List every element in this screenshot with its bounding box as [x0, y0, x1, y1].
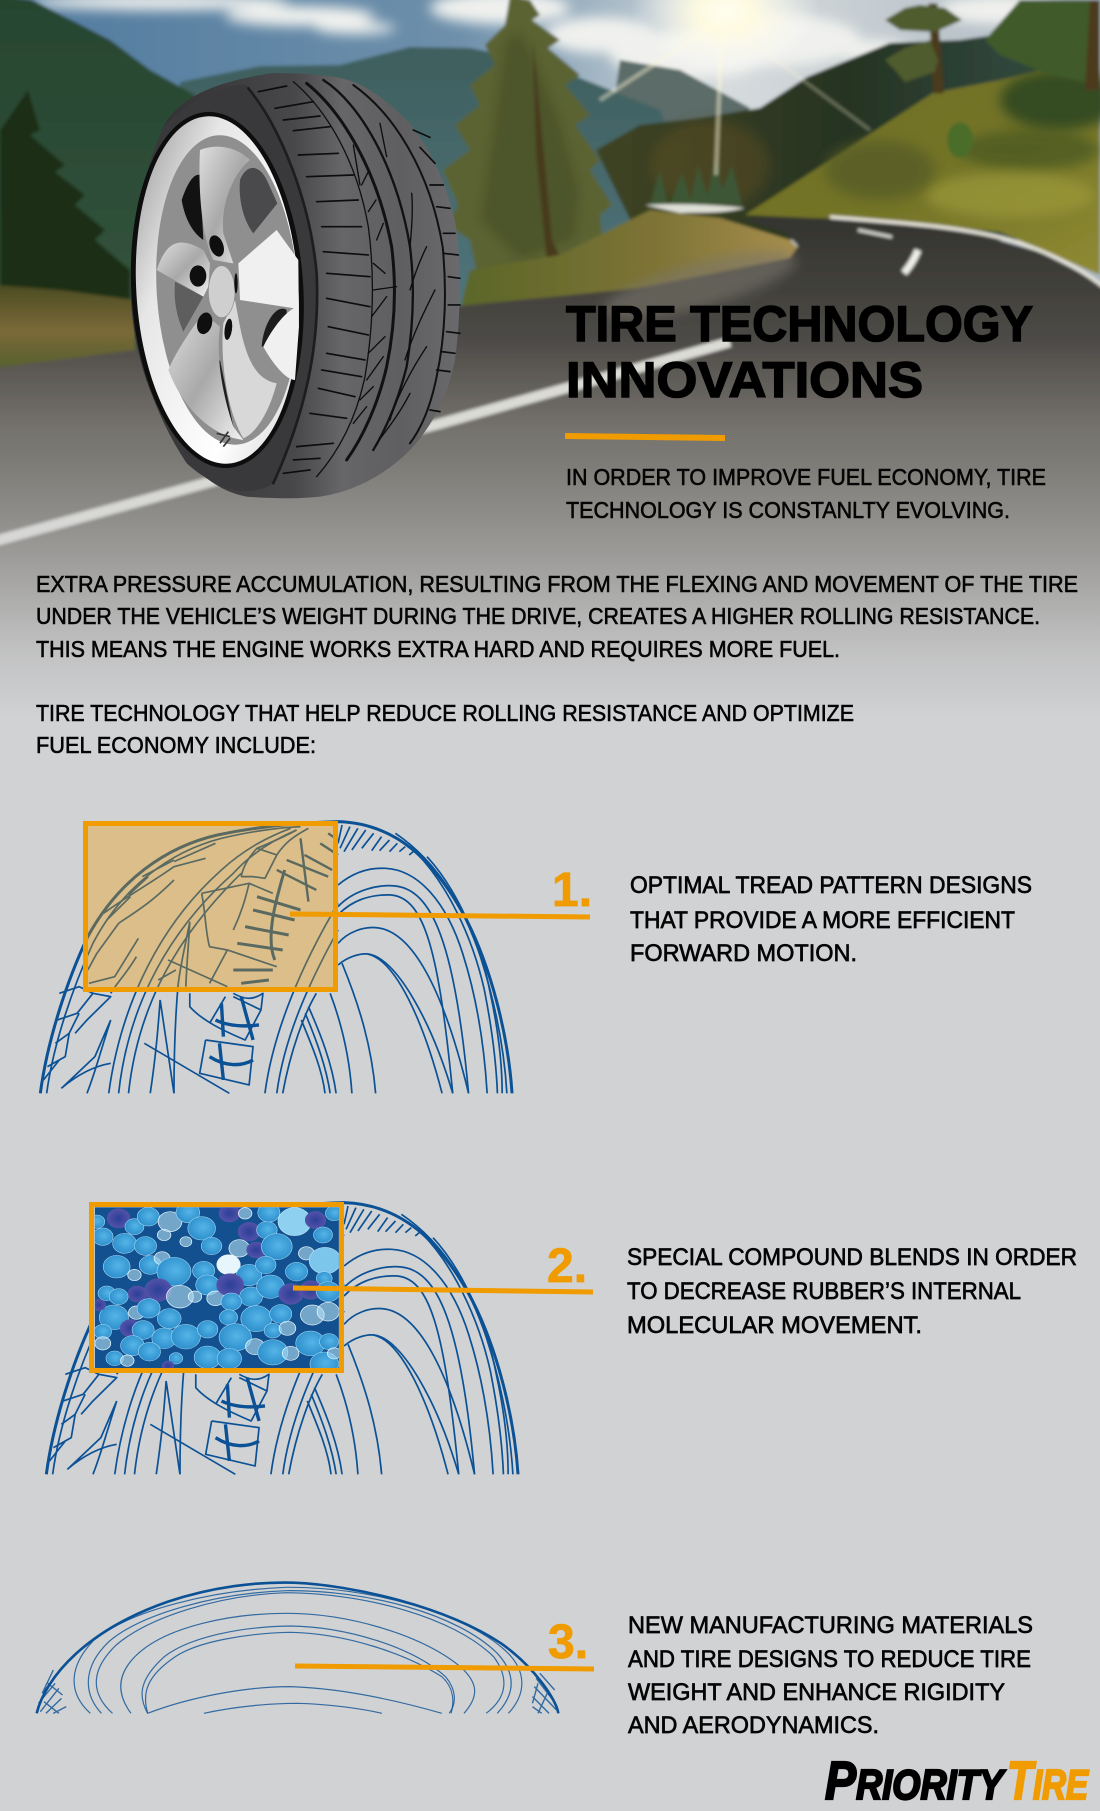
list intro [36, 700, 854, 758]
step 1 text: FORWARD MOTION. [630, 940, 857, 967]
road sunlit patch [602, 250, 799, 322]
road surface [0, 217, 1100, 720]
title [566, 296, 1033, 408]
title: INNOVATIONS [566, 352, 923, 408]
lug holes [190, 233, 238, 340]
subtitle: IN ORDER TO IMPROVE FUEL ECONOMY, TIRE [566, 464, 1046, 490]
list intro: FUEL ECONOMY INCLUDE: [36, 732, 316, 758]
sunlit right forest [595, 34, 1040, 243]
step 1 text: OPTIMAL TREAD PATTERN DESIGNS [630, 872, 1032, 899]
wheel windows [182, 175, 203, 240]
intro paragraph: UNDER THE VEHICLE’S WEIGHT DURING THE DRIVE, CREATES A HIGHER ROLLING RESISTANCE. [36, 603, 1040, 629]
far road segment [645, 204, 745, 213]
road centre line [0, 342, 730, 541]
step 3 text: AND TIRE DESIGNS TO REDUCE TIRE [628, 1646, 1031, 1673]
teal middle mountain [178, 46, 664, 308]
wheel inner [147, 131, 307, 449]
number 1: 1. [552, 864, 592, 917]
step 2 text: SPECIAL COMPOUND BLENDS IN ORDER [627, 1244, 1077, 1271]
step 3 text [628, 1612, 1033, 1739]
sky [16, 0, 1100, 283]
step 1 text [630, 872, 1032, 967]
wheel hub [208, 266, 235, 318]
clouds [30, 0, 1060, 79]
step 3 text: AND AERODYNAMICS. [628, 1712, 879, 1739]
number 2: 2. [547, 1240, 587, 1293]
grey distant peak [614, 58, 752, 125]
leader line 2 [293, 1288, 593, 1292]
title underline [565, 436, 725, 438]
leader line 1 [290, 914, 590, 917]
road right edge line [830, 217, 1100, 288]
road dashes [904, 250, 918, 273]
tire silhouette [131, 73, 460, 498]
step 2 text: TO DECREASE RUBBER’S INTERNAL [627, 1278, 1021, 1305]
warm haze over forest [650, 120, 770, 210]
tire diagram 2: compound blends [46, 1202, 518, 1474]
leader line 3 [295, 1666, 594, 1669]
molecule photo inset [94, 1207, 339, 1368]
list intro: TIRE TECHNOLOGY THAT HELP REDUCE ROLLING RESISTANCE AND OPTIMIZE [36, 700, 854, 726]
logo: Priority Tire: PRIORITY [825, 1751, 1006, 1811]
valve detail [217, 432, 230, 447]
sidewall shade [131, 85, 317, 491]
left foreground grass [0, 285, 135, 370]
left dark mountain [0, 0, 205, 350]
tread grooves [248, 80, 445, 483]
number 3: 3. [548, 1616, 588, 1669]
step 3 text: NEW MANUFACTURING MATERIALS [628, 1612, 1033, 1639]
center grass mound [460, 210, 798, 310]
left fir tree [0, 92, 130, 300]
step 2 text: MOLECULAR MOVEMENT. [627, 1312, 922, 1339]
tread block lines [258, 86, 460, 473]
sunlit hillside [745, 55, 1100, 275]
tire diagram 1: tread pattern [40, 822, 512, 1093]
step 3 text: WEIGHT AND ENHANCE RIGIDITY [628, 1679, 1005, 1706]
intro paragraph [36, 571, 1078, 662]
center pine tree [443, 0, 612, 290]
rim black edge [121, 107, 314, 473]
intro paragraph: THIS MEANS THE ENGINE WORKS EXTRA HARD AND REQUIRES MORE FUEL. [36, 636, 840, 662]
tire diagram 3: side profile [37, 1583, 558, 1713]
tire photo [121, 73, 460, 498]
step 1 text: THAT PROVIDE A MORE EFFICIENT [630, 907, 1015, 934]
subtitle [566, 464, 1046, 523]
wheel spokes [238, 230, 299, 380]
sun glow [637, 0, 808, 48]
title: TIRE TECHNOLOGY [566, 296, 1033, 352]
fade to grey [0, 340, 1100, 720]
small firs [650, 166, 742, 205]
sun rays [598, 64, 872, 178]
subtitle: TECHNOLOGY IS CONSTANLTY EVOLVING. [566, 497, 1010, 523]
rim lip [126, 111, 309, 469]
hero landscape photo [0, 0, 1100, 720]
pine trees right [930, 5, 942, 92]
step 2 text [627, 1244, 1077, 1339]
